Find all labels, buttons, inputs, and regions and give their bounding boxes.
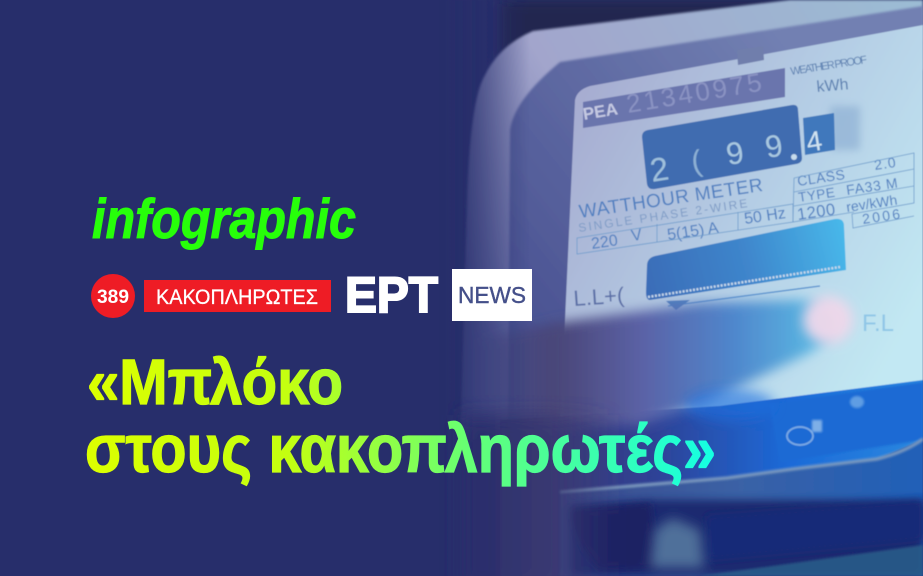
meter specification text: CLASS — [796, 166, 846, 189]
blue flare — [685, 389, 775, 421]
F.L label: F.L — [862, 310, 894, 337]
lower metal post — [650, 518, 704, 568]
counter display: ( — [689, 145, 704, 179]
counter display: 9 — [724, 135, 746, 172]
finger tip glow — [803, 296, 853, 344]
meter specification text: 2006 — [861, 205, 903, 227]
title line 2: στους κακοπληρωτές» — [85, 411, 716, 487]
meter specification text — [577, 154, 903, 253]
dark shadow left — [572, 503, 658, 570]
meter specification text: V — [630, 227, 643, 245]
meter specification text: SINGLE PHASE 2-WIRE — [577, 196, 750, 235]
inner housing band — [508, 6, 923, 440]
meter specification text: 50 Hz — [743, 205, 787, 228]
red label: bad payers: ΚΑΚΟΠΛΗΡΩΤΕΣ — [156, 286, 318, 309]
finger shape — [470, 300, 835, 425]
meter specification text: FA33 M — [845, 174, 899, 198]
serial number bar: 21340975 — [624, 66, 767, 119]
lower left fade overlay — [460, 415, 630, 576]
specification table lines — [577, 153, 914, 254]
meter specification text: rev/kWh — [845, 192, 898, 215]
counter display: 9 — [763, 128, 785, 165]
L.L+ label: L.L+( — [573, 282, 626, 311]
logo: NEWS box: NEWS — [458, 282, 526, 308]
serial number bar: PEA — [582, 99, 619, 124]
meter specification text: 220 — [590, 232, 619, 253]
photo: electricity meter — [440, 0, 923, 576]
lower meter blue region — [500, 380, 923, 576]
meter specification text: 5(15) A — [666, 220, 720, 244]
heading: infographic: infographic — [92, 187, 356, 250]
counter display — [642, 105, 802, 189]
meter specification text: 2.0 — [873, 154, 898, 173]
terminal screw — [770, 382, 923, 462]
meter specification text: TYPE — [797, 185, 836, 205]
serial number bar — [582, 66, 785, 128]
meter window — [646, 219, 846, 310]
bottom dark panel — [570, 500, 923, 576]
meter face — [560, 25, 923, 420]
badge: 389 — [91, 274, 135, 318]
decimal digit box — [803, 106, 860, 158]
upper left fade overlay — [440, 0, 540, 576]
lower housing band — [560, 439, 923, 576]
decimal digit box: 4 — [804, 125, 824, 158]
top dark band — [500, 0, 923, 60]
weather proof label — [790, 54, 869, 96]
title — [85, 346, 716, 487]
bottom teal edge — [700, 545, 923, 576]
meter specification text: 1200 — [796, 200, 837, 224]
meter specification text: WATTHOUR METER — [578, 175, 765, 223]
dark shadow right — [707, 500, 923, 560]
counter display: 2 — [647, 149, 671, 189]
weather proof label: WEATHER PROOF — [790, 54, 869, 78]
logo: ERT: ΕΡΤ — [345, 267, 438, 323]
meter housing — [460, 0, 923, 440]
logo: NEWS box — [452, 269, 532, 321]
lip highlight — [560, 439, 923, 492]
title line 1: «Μπλόκο — [87, 346, 343, 418]
red label: bad payers — [144, 280, 331, 312]
housing clip — [737, 46, 764, 65]
weather proof label: kWh — [816, 76, 849, 96]
badge: 389: 389 — [97, 287, 129, 308]
